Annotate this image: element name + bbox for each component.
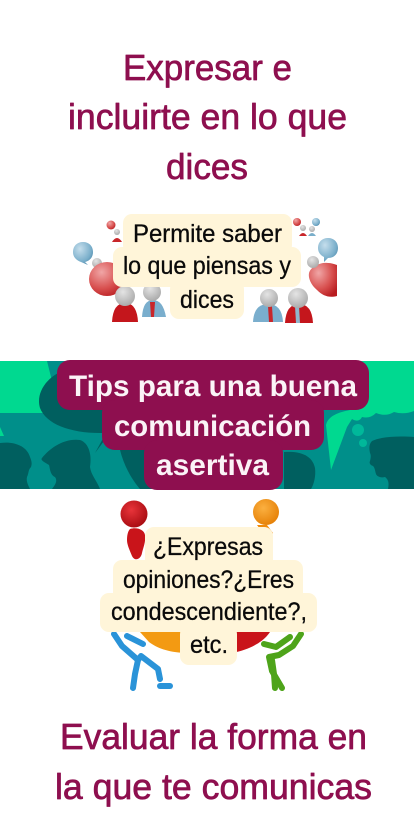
panel: permite saber: Permite saber [133, 220, 282, 248]
title: evaluar la forma: la que te comunicas [55, 766, 372, 807]
icon: right grey head [307, 256, 319, 268]
icon: left blue bubble [73, 242, 93, 265]
illustration: figures carrying a disc with balloon heads [114, 499, 301, 688]
left green bubble [0, 361, 60, 413]
icon: small right speech bubbles [293, 218, 320, 236]
icon: orange balloon figure [253, 499, 279, 539]
icon: right blue bubble [318, 238, 338, 262]
panel: banner heading: Tips para una buena [69, 370, 357, 403]
person: blue left [142, 283, 166, 317]
panel: expresas opiniones [100, 527, 317, 665]
panel: permite saber [113, 214, 301, 319]
title: evaluar la forma: Evaluar la forma en [60, 716, 367, 757]
icon: small left speech bubbles [106, 220, 122, 242]
panel: permite saber: dices [180, 286, 234, 314]
panel: expresas opiniones: etc. [190, 631, 228, 659]
panel: expresas opiniones: ¿Expresas [153, 533, 263, 561]
panel: expresas opiniones: condescendiente?, [111, 598, 307, 626]
dark speech bubble [39, 372, 115, 453]
thought circles [352, 424, 367, 447]
banner background: crowd with speech bubbles [0, 361, 414, 489]
icon: left red bubble [89, 258, 125, 296]
panel: banner heading: comunicación [114, 410, 311, 443]
person: red left [112, 286, 138, 322]
panel: permite saber: lo que piensas y [123, 252, 291, 280]
icon: right red bubble [309, 263, 337, 297]
title: expresar e incluirte: incluirte en lo que [68, 96, 347, 137]
illustration: people talking with speech bubbles [73, 218, 338, 323]
panel: banner heading [57, 360, 369, 490]
title: expresar e incluirte: dices [166, 146, 248, 187]
icon: blue figure [114, 634, 170, 688]
icon: orange and red disc [140, 632, 270, 653]
title: evaluar la forma [55, 716, 372, 807]
icon: green figure [264, 634, 301, 688]
title: expresar e incluirte [68, 47, 347, 187]
panel: banner heading: asertiva [156, 449, 269, 482]
person: blue right [253, 289, 283, 322]
right green bubble [320, 361, 414, 470]
silhouettes [0, 443, 32, 489]
icon: red balloon figure [120, 500, 148, 559]
title: expresar e incluirte: Expresar e [123, 47, 292, 88]
panel: expresas opiniones: opiniones?¿Eres [123, 566, 294, 594]
person: red right [285, 288, 313, 323]
